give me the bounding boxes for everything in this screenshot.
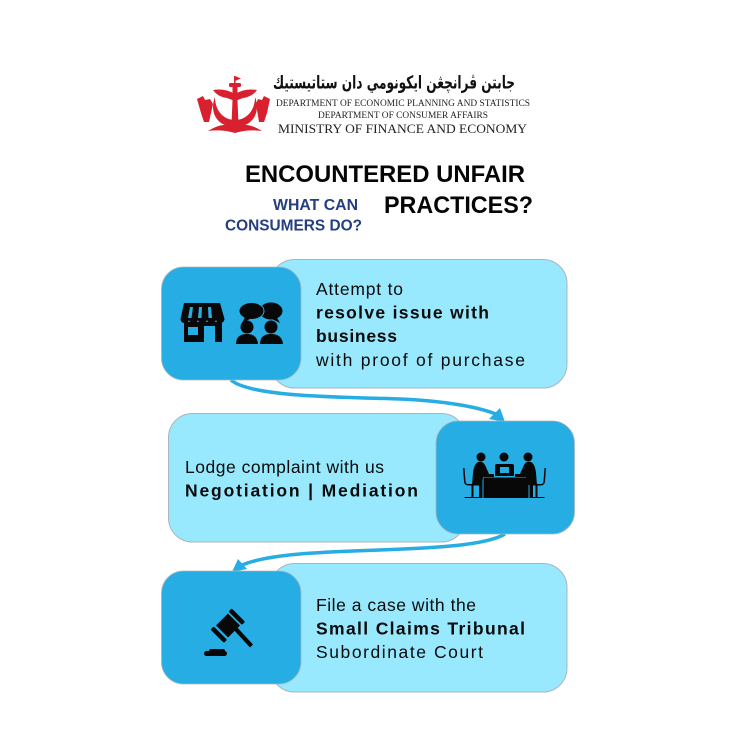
panel: step 2 text xyxy=(168,414,466,542)
header: Jawi department name: جابتن ڤرانچڠن ايكونومي دان ستاتيستيك xyxy=(273,72,515,94)
panel: step 1 icon tile xyxy=(162,267,301,380)
title: PRACTICES? xyxy=(384,192,533,219)
icon: two people talking xyxy=(236,302,283,344)
step 1 text: resolve issue with xyxy=(316,302,489,322)
step 3 text: Small Claims Tribunal xyxy=(316,618,525,638)
icon: gavel xyxy=(204,608,253,656)
header: department of consumer affairs: DEPARTMENT OF CONSUMER AFFAIRS xyxy=(318,111,488,121)
step 2 text: Negotiation | Mediation xyxy=(185,480,418,500)
subtitle: WHAT CAN xyxy=(273,197,358,214)
icon: storefront xyxy=(180,303,224,342)
arrow: step 1 to step 2 xyxy=(231,380,505,422)
header: ministry: MINISTRY OF FINANCE AND ECONOMY xyxy=(278,122,527,136)
step 2 text xyxy=(185,457,418,500)
panel: step 3 icon tile xyxy=(162,571,301,684)
panel: step 2 icon tile xyxy=(436,421,574,534)
icon: Brunei crest logo xyxy=(197,76,270,133)
step 1 text: Attempt to xyxy=(316,279,403,299)
step 1 text: business xyxy=(316,326,397,346)
panel: step 1 text xyxy=(270,260,567,388)
step 3 text: Subordinate Court xyxy=(316,642,483,662)
step 1 text xyxy=(315,279,525,370)
subtitle: CONSUMERS DO? xyxy=(225,218,362,234)
step 3 text xyxy=(316,595,525,662)
panel: step 3 text xyxy=(270,564,567,692)
title xyxy=(245,161,533,219)
step 2 text: Lodge complaint with us xyxy=(185,457,384,477)
step 1 text: with proof of purchase xyxy=(315,350,525,370)
arrow: step 2 to step 3 xyxy=(232,534,505,572)
icon: negotiation table xyxy=(463,452,546,498)
step 3 text: File a case with the xyxy=(316,595,476,615)
title: ENCOUNTERED UNFAIR xyxy=(245,161,525,188)
header: department of economic planning: DEPARTMENT OF ECONOMIC PLANNING AND STATISTICS xyxy=(276,99,530,109)
subtitle xyxy=(225,197,362,234)
